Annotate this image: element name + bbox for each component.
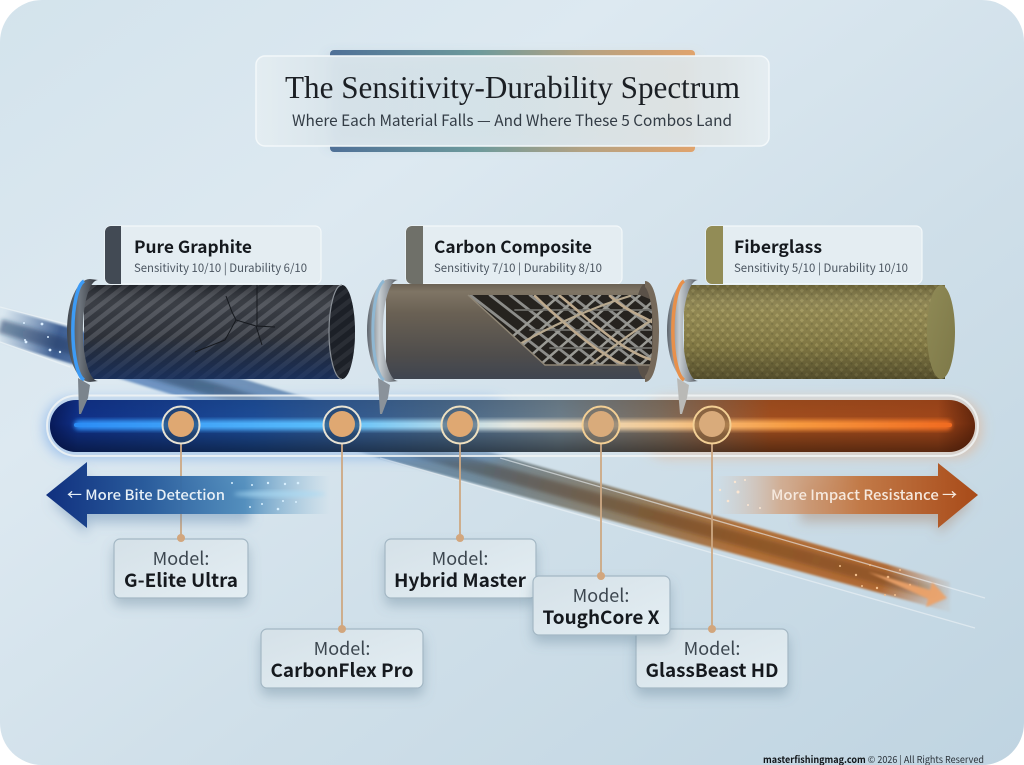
fiberglass needle <box>677 378 689 414</box>
model card: GlassBeast HD: GlassBeast HD <box>646 657 778 683</box>
composite needle <box>378 378 390 414</box>
model card: Hybrid Master <box>385 534 536 598</box>
material card: Pure Graphite <box>105 226 321 284</box>
carbon composite cylinder <box>367 279 659 414</box>
model card: Hybrid Master: Model: <box>432 545 488 571</box>
spectrum nodes <box>162 406 730 444</box>
model card: GlassBeast HD <box>636 625 788 688</box>
arrow: more bite detection <box>46 462 330 535</box>
composite collar <box>367 279 398 382</box>
graphite cylinder <box>67 279 355 414</box>
composite cut edge <box>468 295 652 365</box>
material card: Fiberglass: Sensitivity 5/10 | Durability 10/10 <box>734 260 908 276</box>
title panel <box>256 50 769 152</box>
material card: Fiberglass: Fiberglass <box>734 233 822 258</box>
sparkle streak <box>234 491 326 497</box>
material card: Fiberglass <box>706 226 922 284</box>
graphite needle <box>78 378 90 414</box>
model card: ToughCore X: Model: <box>573 582 629 608</box>
material card: Pure Graphite: Pure Graphite <box>134 233 252 258</box>
model card: CarbonFlex Pro <box>261 625 423 688</box>
spectrum bar <box>44 396 982 458</box>
arrow: more impact resistance: More Impact Resistance → <box>771 485 957 505</box>
model card: CarbonFlex Pro: CarbonFlex Pro <box>270 657 414 683</box>
fiberglass end cap <box>927 285 955 379</box>
model card: GlassBeast HD: Model: <box>684 635 740 661</box>
fiberglass cylinder <box>667 279 955 414</box>
diagonal fishing rod <box>0 307 985 628</box>
arrow: more bite detection: ← More Bite Detection <box>67 485 225 505</box>
model card: G-Elite Ultra: G-Elite Ultra <box>124 567 238 593</box>
subtitle: Where Each Material Falls — And Where These 5 Combos Land <box>292 109 732 131</box>
arrow: more impact resistance <box>715 463 978 535</box>
model card: CarbonFlex Pro: Model: <box>314 635 370 661</box>
rod arrow tip <box>868 572 947 607</box>
model card: Hybrid Master: Hybrid Master <box>394 567 527 593</box>
model card: G-Elite Ultra: Model: <box>153 545 209 571</box>
leader lines <box>181 444 712 629</box>
material card: Carbon Composite <box>406 226 622 284</box>
model card: ToughCore X: ToughCore X <box>542 604 660 630</box>
model card: G-Elite Ultra <box>114 534 248 598</box>
fiberglass collar <box>667 279 698 382</box>
model card: ToughCore X <box>533 572 670 635</box>
rod sparks <box>839 564 911 596</box>
graphite collar <box>67 279 98 382</box>
material card: Pure Graphite: Sensitivity 10/10 | Durability 6/10 <box>134 260 307 276</box>
material card: Carbon Composite: Carbon Composite <box>434 233 592 258</box>
woven fibers <box>469 295 652 364</box>
left rod sparks <box>23 322 61 353</box>
material card: Carbon Composite: Sensitivity 7/10 | Durability 8/10 <box>434 260 602 276</box>
title: The Sensitivity-Durability Spectrum <box>285 69 740 105</box>
